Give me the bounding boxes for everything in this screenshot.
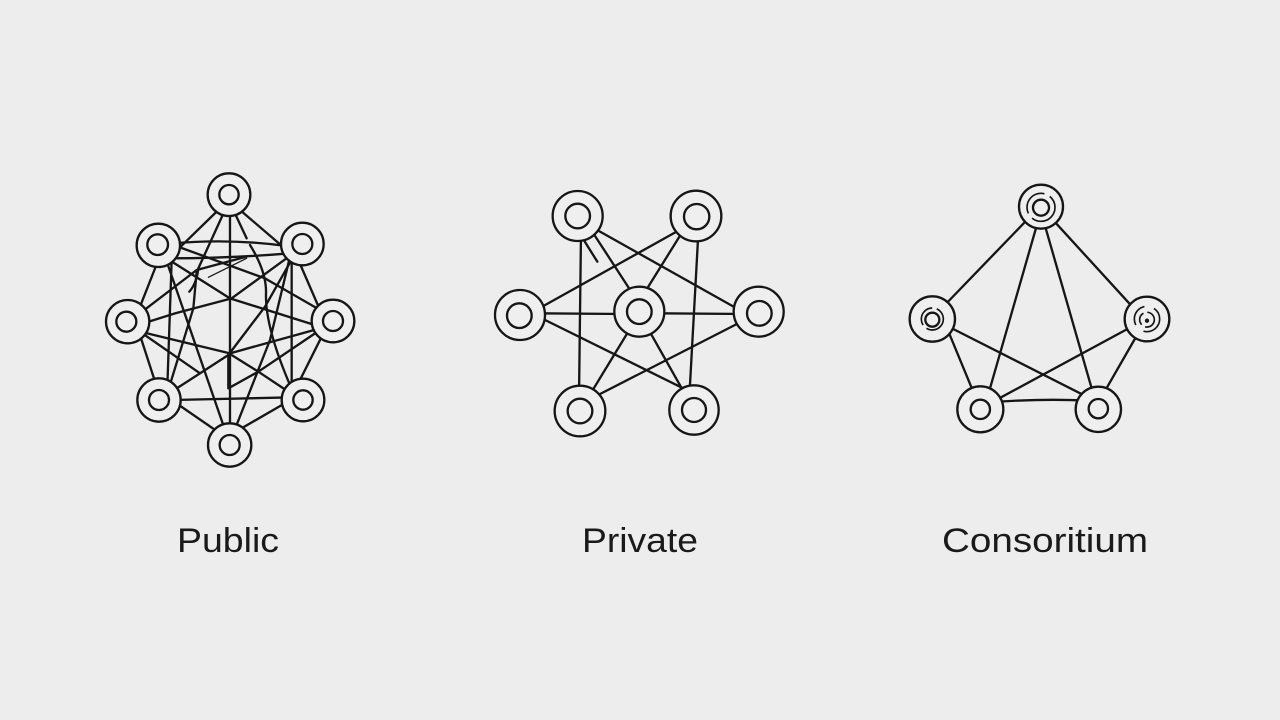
public network connecting lines <box>138 210 323 435</box>
private network connecting lines <box>533 225 747 400</box>
diagram: public network <box>106 173 354 467</box>
public network nodes <box>106 173 354 467</box>
panel: public network <box>106 173 354 560</box>
label: Consoritium: Consoritium <box>942 522 1148 560</box>
consortium network connecting lines <box>940 213 1140 403</box>
consortium network nodes <box>910 185 1169 432</box>
diagram: consortium network <box>910 185 1169 432</box>
private network nodes <box>495 191 784 436</box>
panel: private network <box>495 191 784 560</box>
diagram: private network <box>495 191 784 436</box>
label: Private: Private <box>582 522 698 560</box>
label: Public: Public <box>177 522 279 560</box>
panel: consortium network <box>910 185 1169 560</box>
